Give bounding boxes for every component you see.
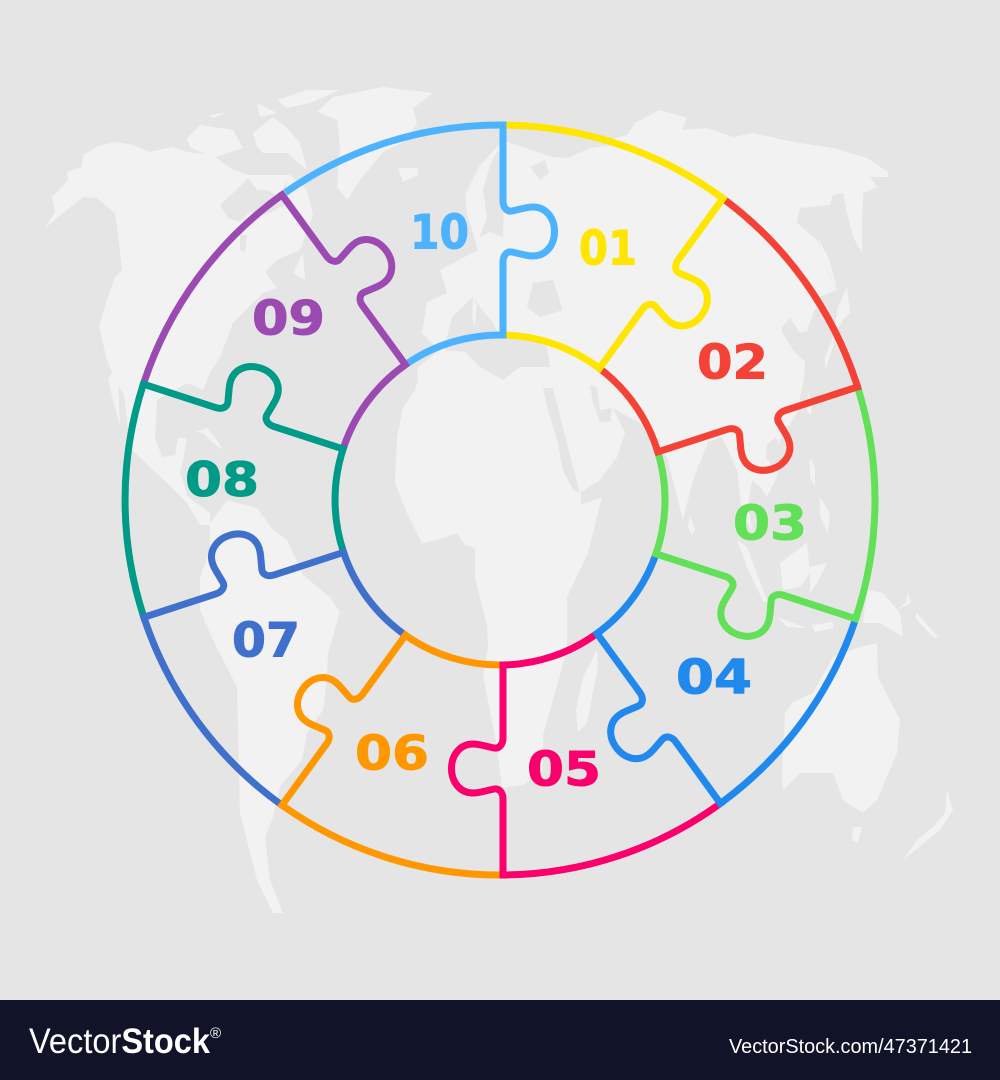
number 01: 01: [579, 222, 637, 276]
timor islands: [812, 622, 834, 632]
number 06: 06: [355, 726, 429, 782]
piece 01: [503, 125, 765, 399]
arcs 09: [143, 195, 405, 449]
image id: VectorStock.com/47371421: [729, 1036, 972, 1058]
number 10: 10: [410, 206, 469, 260]
joint 06: [240, 605, 405, 805]
footer bar: [0, 1000, 1000, 1080]
north america: [45, 142, 313, 525]
yellow sea: [782, 318, 817, 360]
sulawesi: [810, 563, 827, 593]
inland seas: [220, 150, 817, 493]
joint 02: [658, 387, 873, 501]
joint 01: [599, 198, 765, 399]
new zealand: [903, 790, 953, 860]
number 02: 02: [697, 336, 768, 390]
java: [777, 617, 807, 628]
arcs 05: [503, 634, 720, 875]
greenland: [317, 87, 433, 200]
number 07: 07: [232, 614, 300, 668]
piece 07: [128, 503, 405, 805]
world map: [45, 87, 953, 913]
registered mark: ®: [210, 1025, 221, 1042]
pacific islands: [897, 592, 911, 610]
piece 06: [240, 605, 503, 875]
arcs 01: [503, 125, 723, 368]
iceland: [398, 168, 418, 182]
logo: VectorStock: [29, 1022, 210, 1061]
philippines: [810, 458, 815, 487]
white sea: [530, 160, 549, 180]
arcs 08: [125, 384, 344, 617]
joint 03: [640, 554, 856, 668]
arcs 06: [282, 635, 503, 875]
piece 02: [599, 198, 873, 501]
baltic: [480, 150, 505, 237]
joint 09: [282, 165, 447, 365]
arcs 10: [285, 125, 503, 363]
australia: [782, 643, 900, 813]
number 08: 08: [185, 453, 259, 508]
joint 05: [452, 665, 503, 875]
arcs 02: [599, 198, 858, 452]
arctic islands: [187, 125, 243, 158]
gulf of tonkin: [766, 437, 780, 465]
persian gulf: [590, 385, 612, 422]
number 03: 03: [733, 496, 807, 552]
piece 05: [452, 634, 720, 875]
number 04: 04: [676, 650, 752, 706]
hudson bay: [220, 178, 287, 222]
sumatra: [737, 540, 768, 603]
sri lanka: [688, 515, 695, 535]
piece 09: [143, 165, 447, 449]
south america: [200, 500, 340, 913]
arcs 07: [144, 552, 405, 805]
arcs 04: [597, 554, 856, 803]
arcs 03: [656, 387, 875, 619]
piece 04: [555, 554, 856, 834]
sakhalin: [818, 238, 837, 287]
red sea: [543, 388, 580, 493]
tasmania: [852, 827, 862, 843]
james bay: [240, 235, 247, 252]
madagascar: [576, 650, 598, 732]
joint 04: [555, 633, 720, 834]
black sea: [527, 280, 563, 317]
joint 08: [143, 335, 359, 449]
piece 03: [640, 387, 875, 668]
number 09: 09: [252, 292, 325, 346]
puzzle ring: [125, 125, 875, 875]
newfoundland: [293, 253, 305, 280]
eurasia and africa: [395, 110, 888, 788]
joint 07: [128, 503, 344, 617]
mediterranean: [445, 297, 550, 380]
japan: [825, 287, 850, 370]
taiwan: [807, 395, 812, 415]
piece 10: [285, 125, 554, 363]
joint 10: [503, 125, 554, 335]
cuba: [195, 428, 223, 450]
number 05: 05: [527, 742, 601, 798]
piece 08: [125, 335, 359, 617]
new guinea: [863, 590, 903, 637]
borneo: [780, 543, 810, 590]
italy: [472, 298, 477, 327]
